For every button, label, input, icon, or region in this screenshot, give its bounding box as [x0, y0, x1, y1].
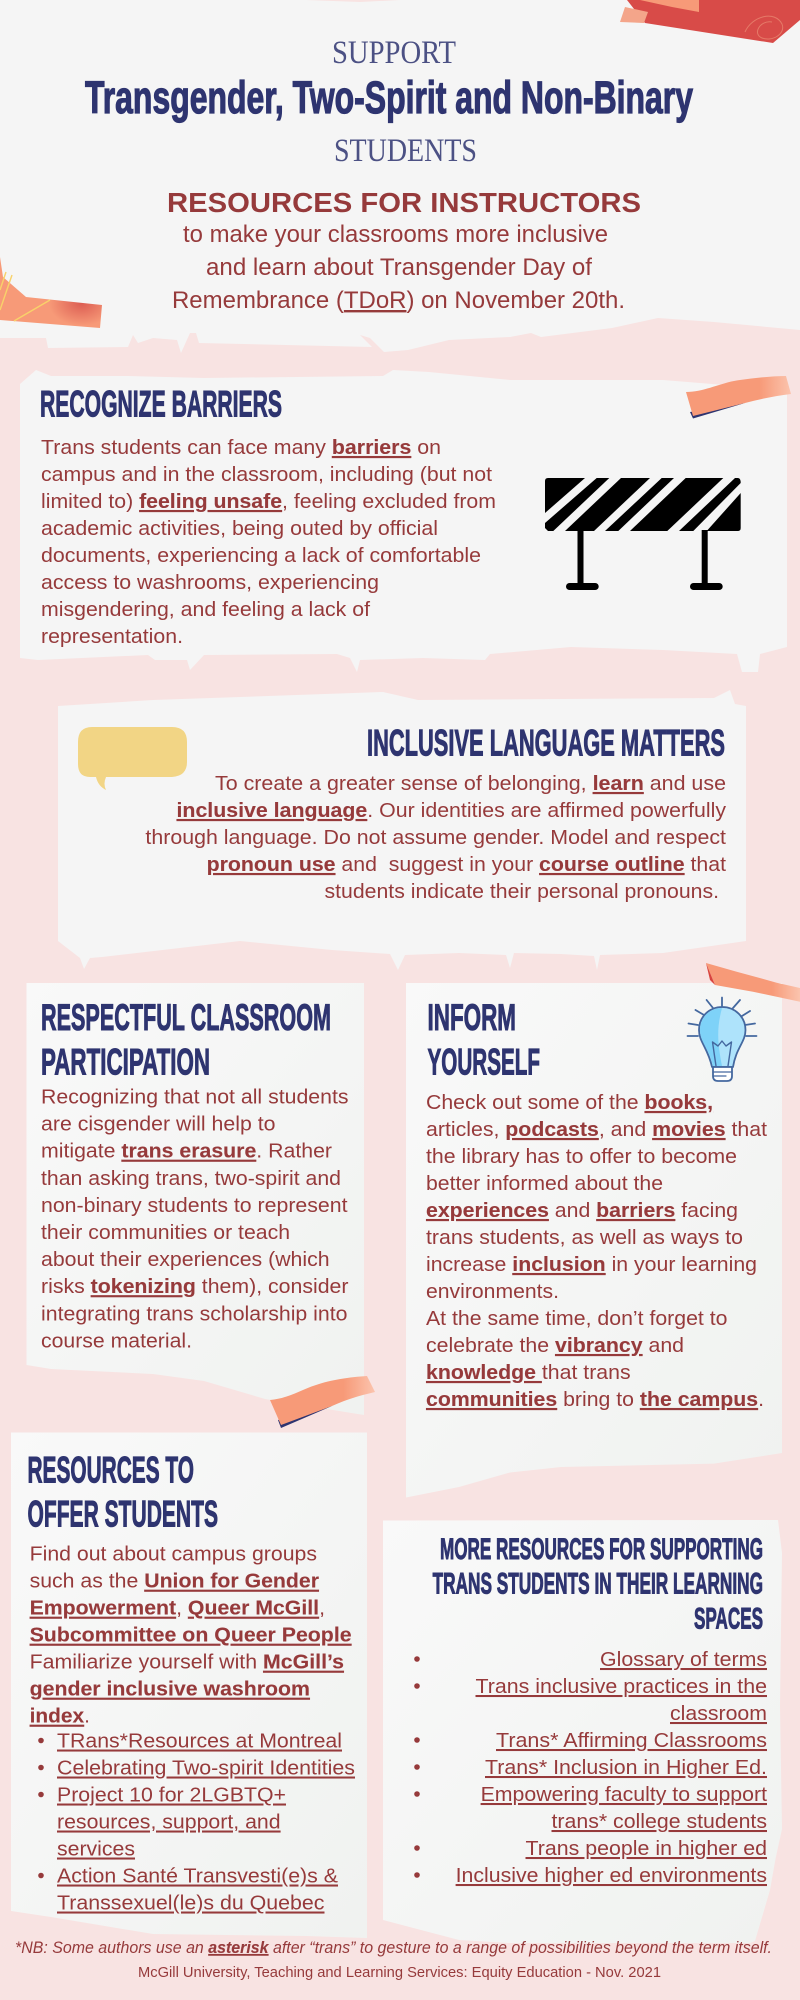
panel: inform yourself — [406, 983, 782, 1498]
icon: speech bubble — [78, 727, 187, 790]
decoration: orange tape — [686, 376, 791, 418]
text: respectful classroom body — [41, 1086, 349, 1352]
text: resources body: Familiarize yourself with McGill’s — [30, 1651, 344, 1674]
heading: respectful classroom participation: PARTICIPATION — [41, 1042, 210, 1082]
text: barriers body: academic activities, being outed by official — [41, 517, 438, 540]
heading: more resources — [433, 1533, 763, 1636]
heading: respectful classroom participation: RESPECTFUL CLASSROOM — [41, 997, 331, 1038]
text: inform yourself body: environments. — [426, 1280, 559, 1303]
list: instructor resources: Empowering faculty to support — [481, 1783, 767, 1806]
list: instructor resources — [414, 1648, 767, 1887]
text: barriers body: documents, experiencing a lack of comfortable — [41, 544, 481, 567]
list: student resources: Action Santé Transvesti(e)s & — [57, 1864, 338, 1888]
text: respectful classroom body: integrating trans scholarship into — [41, 1302, 348, 1325]
text: inclusive language body: through language. Do not assume gender. Model and respect — [145, 826, 726, 849]
text: respectful classroom body: are cisgender will help to — [41, 1113, 276, 1136]
credit line: McGill University, Teaching and Learning Services: Equity Education - Nov. 2021 — [138, 1964, 661, 1981]
list: instructor resources: Trans* Affirming Classrooms — [496, 1729, 767, 1752]
text: respectful classroom body: Recognizing that not all students — [41, 1086, 348, 1108]
list: instructor resources: classroom — [670, 1702, 767, 1725]
list: student resources: resources, support, and — [57, 1810, 281, 1834]
text: barriers body: campus and in the classroom, including (but not — [41, 463, 492, 486]
text: inform yourself body: increase inclusion in your learning — [426, 1253, 757, 1276]
panel: respectful classroom participation — [26, 983, 364, 1415]
text: resources body: Subcommittee on Queer People — [30, 1624, 352, 1647]
heading: recognize barriers: RECOGNIZE BARRIERS — [40, 384, 282, 424]
list: instructor resources: Trans* Inclusion in Higher Ed. — [485, 1756, 767, 1779]
list: student resources: Transsexuel(le)s du Quebec — [57, 1892, 324, 1914]
heading: respectful classroom participation — [41, 997, 331, 1082]
panel: inclusive language matters — [58, 690, 746, 970]
icon: light bulb — [688, 998, 756, 1081]
list: instructor resources: trans* college students — [552, 1810, 767, 1833]
text: inform yourself body: At the same time, don’t forget to — [426, 1307, 728, 1330]
text: respectful classroom body: about their experiences (which — [41, 1248, 330, 1271]
text: inform yourself body: better informed about the — [426, 1172, 663, 1195]
subtitle text: to make your classrooms more inclusive — [183, 221, 608, 248]
text: inform yourself body: the library has to offer to become — [426, 1145, 737, 1168]
decoration: orange tape bottom — [270, 1376, 375, 1428]
heading: resources to offer students: RESOURCES TO — [28, 1450, 194, 1490]
panel: more resources — [383, 1520, 782, 1943]
text: inclusive language body: To create a greater sense of belonging, learn and use — [215, 772, 726, 795]
text: inform yourself body: celebrate the vibrancy and — [426, 1334, 684, 1357]
text: inform yourself body: articles, podcasts, and movies that — [426, 1118, 767, 1141]
title: support: SUPPORT — [332, 35, 456, 71]
text: respectful classroom body: than asking trans, two-spirit and — [41, 1167, 341, 1190]
header torn panel — [0, 0, 800, 353]
text: resources body: index. — [30, 1705, 90, 1728]
text: resources body — [30, 1543, 352, 1728]
text: resources body: such as the Union for Gender — [30, 1570, 319, 1593]
footnote: *NB: Some authors use an asterisk after “trans” to gesture to a range of possibilities beyond the term itself. — [15, 1938, 772, 1957]
list: instructor resources: Trans people in higher ed — [526, 1837, 767, 1860]
list: student resources — [38, 1730, 355, 1914]
title: students: STUDENTS — [334, 133, 477, 169]
list: instructor resources: Glossary of terms — [600, 1648, 767, 1671]
text: resources body: Empowerment , Queer McGill, — [30, 1597, 325, 1620]
text: inform yourself body: knowledge that trans — [426, 1361, 631, 1384]
text: respectful classroom body: their communities or teach — [41, 1221, 290, 1244]
text: inform yourself body: experiences and barriers facing — [426, 1199, 738, 1222]
list: student resources: services — [57, 1838, 135, 1860]
subtitle heading: RESOURCES FOR INSTRUCTORS — [167, 187, 641, 218]
text: respectful classroom body: mitigate trans erasure. Rather — [41, 1140, 332, 1163]
heading: resources to offer students — [28, 1450, 218, 1534]
text: barriers body: representation. — [41, 625, 183, 648]
text: resources body: Find out about campus groups — [30, 1543, 317, 1566]
decoration: top right red paper — [620, 0, 800, 43]
decoration: left orange paper — [0, 257, 102, 328]
text: inform yourself body — [426, 1091, 767, 1411]
decoration: top pink sliver — [306, 0, 400, 2]
text: inclusive language body: pronoun use and suggest in your course outline that — [207, 853, 726, 876]
text: barriers body: Trans students can face many barriers on — [41, 436, 441, 459]
text: inform yourself body: communities bring to the campus. — [426, 1388, 764, 1411]
panel: resources to offer students — [11, 1432, 367, 1938]
decoration: orange tape right — [706, 963, 800, 1002]
icon: road barrier — [545, 478, 741, 590]
subtitle text: Remembrance (TDoR) on November 20th. — [172, 287, 625, 314]
list: student resources: Project 10 for 2LGBTQ+ — [57, 1784, 286, 1806]
subtitle text — [172, 221, 625, 314]
text: barriers body: limited to) feeling unsafe , feeling excluded from — [41, 490, 496, 513]
text: resources body: gender inclusive washroom — [30, 1678, 310, 1701]
list: student resources: Celebrating Two-spirit Identities — [57, 1756, 355, 1780]
title block — [85, 35, 693, 169]
text: respectful classroom body: non-binary students to represent — [41, 1194, 348, 1217]
text: inclusive language body — [145, 772, 727, 903]
heading: inform yourself: YOURSELF — [428, 1042, 540, 1082]
heading: inform yourself: INFORM — [428, 997, 516, 1038]
text: inclusive language body: inclusive language . Our identities are affirmed powerfully — [176, 799, 727, 822]
text: barriers body: misgendering, and feeling a lack of — [41, 598, 370, 621]
text: respectful classroom body: course material. — [41, 1329, 192, 1352]
list: instructor resources: Inclusive higher ed environments — [456, 1864, 767, 1887]
heading: resources to offer students: OFFER STUDENTS — [28, 1494, 218, 1534]
text: barriers body — [41, 436, 496, 648]
subtitle text: and learn about Transgender Day of — [206, 254, 592, 281]
heading: inform yourself — [428, 997, 540, 1082]
subtitle block — [167, 187, 641, 314]
text: inform yourself body: trans students, as well as ways to — [426, 1226, 743, 1249]
text: inclusive language body: students indicate their personal pronouns. — [324, 880, 719, 903]
text: respectful classroom body: risks tokenizing them), consider — [41, 1275, 349, 1298]
text: barriers body: access to washrooms, experiencing — [41, 571, 379, 594]
panel: recognize barriers — [20, 370, 791, 672]
text: inform yourself body: Check out some of the books, — [426, 1091, 713, 1114]
list: student resources: TRans*Resources at Montreal — [57, 1730, 342, 1752]
list: instructor resources: Trans inclusive practices in the — [476, 1675, 767, 1698]
